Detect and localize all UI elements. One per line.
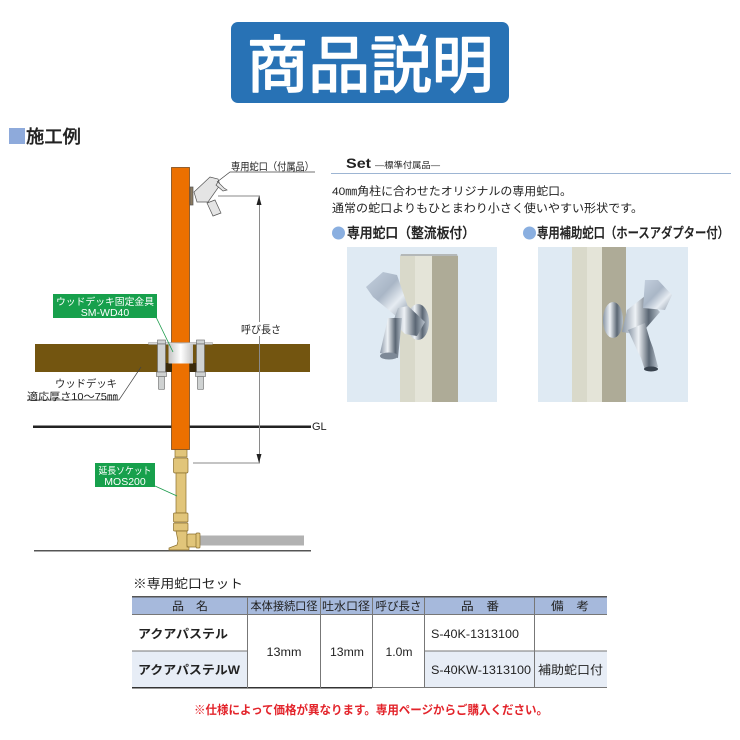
table header: 品 名 bbox=[172, 599, 208, 613]
label: faucet accessory bbox=[217, 160, 315, 182]
wood deck bbox=[35, 344, 310, 372]
dimension: nominal length: 呼び長さ bbox=[241, 324, 281, 336]
spec table bbox=[132, 596, 607, 688]
table header: 品 番 bbox=[461, 600, 500, 613]
table rows: 補助蛇口付 bbox=[538, 663, 603, 677]
table header: 本体接続口径 bbox=[250, 599, 318, 613]
table header: 吐水口径 bbox=[322, 600, 371, 613]
table header: 呼び長さ bbox=[376, 600, 422, 613]
product photo bbox=[538, 247, 688, 402]
table rows: アクアパステルW bbox=[138, 663, 241, 677]
icon: faucet line drawing bbox=[190, 177, 227, 216]
label: wood deck thickness: ウッドデッキ bbox=[55, 377, 117, 390]
table rows: 1.0m bbox=[386, 645, 412, 659]
table rows: 13mm bbox=[266, 645, 302, 659]
table header: 備 考 bbox=[551, 600, 589, 613]
set heading bbox=[331, 155, 731, 174]
description text bbox=[332, 184, 643, 215]
label: extension socket: MOS200 bbox=[104, 476, 146, 488]
table rows: 13mm bbox=[330, 645, 364, 659]
post bbox=[172, 168, 190, 450]
panel: auxiliary faucet with hose adapter bbox=[523, 225, 729, 402]
description text: 通常の蛇口よりもひとまわり小さく使いやすい形状です。 bbox=[332, 201, 643, 215]
table header bbox=[132, 596, 607, 615]
icon: faucet with adapter bbox=[603, 280, 672, 372]
label: extension socket: 延長ソケット bbox=[98, 465, 152, 477]
table rows: アクアパステル bbox=[138, 627, 228, 641]
table rows bbox=[138, 627, 603, 677]
price note: ※仕様によって価格が異なります。専用ページからご購入ください。 bbox=[194, 702, 548, 717]
water pipe bbox=[200, 536, 304, 546]
set heading: Set bbox=[346, 155, 371, 171]
table row shading bbox=[132, 651, 247, 687]
panel: faucet with flow straightener bbox=[332, 225, 497, 402]
extension socket bbox=[169, 449, 200, 550]
label: extension socket bbox=[95, 463, 177, 496]
set heading: ―標準付属品― bbox=[375, 160, 441, 170]
description text: 40㎜角柱に合わせたオリジナルの専用蛇口。 bbox=[332, 184, 572, 198]
icon: faucet bbox=[366, 272, 429, 360]
table rows: S-40KW-1313100 bbox=[431, 663, 531, 677]
table caption: ※専用蛇口セット bbox=[133, 577, 243, 591]
heading: construction example: 施工例 bbox=[26, 127, 81, 147]
product photo bbox=[347, 247, 497, 402]
label: wood deck fixing bracket bbox=[53, 294, 173, 352]
bottom ground line bbox=[34, 550, 311, 552]
label: faucet accessory: 専用蛇口（付属品） bbox=[231, 160, 314, 173]
label: wood deck fixing bracket: ウッドデッキ固定金具 bbox=[56, 295, 154, 308]
ground line: GL bbox=[312, 421, 327, 433]
table rules bbox=[132, 597, 607, 688]
heading: 専用蛇口（整流板付） bbox=[347, 225, 475, 241]
dimension: nominal length bbox=[193, 196, 282, 463]
table rows: S-40K-1313100 bbox=[431, 627, 519, 641]
label: wood deck thickness: 適応厚さ10～75㎜ bbox=[27, 390, 119, 403]
label: wood deck fixing bracket: SM-WD40 bbox=[81, 307, 129, 319]
label: wood deck thickness bbox=[27, 367, 141, 403]
title banner: 商品説明 bbox=[246, 32, 494, 101]
installation diagram bbox=[27, 160, 327, 552]
wood deck clamp bbox=[148, 340, 212, 390]
